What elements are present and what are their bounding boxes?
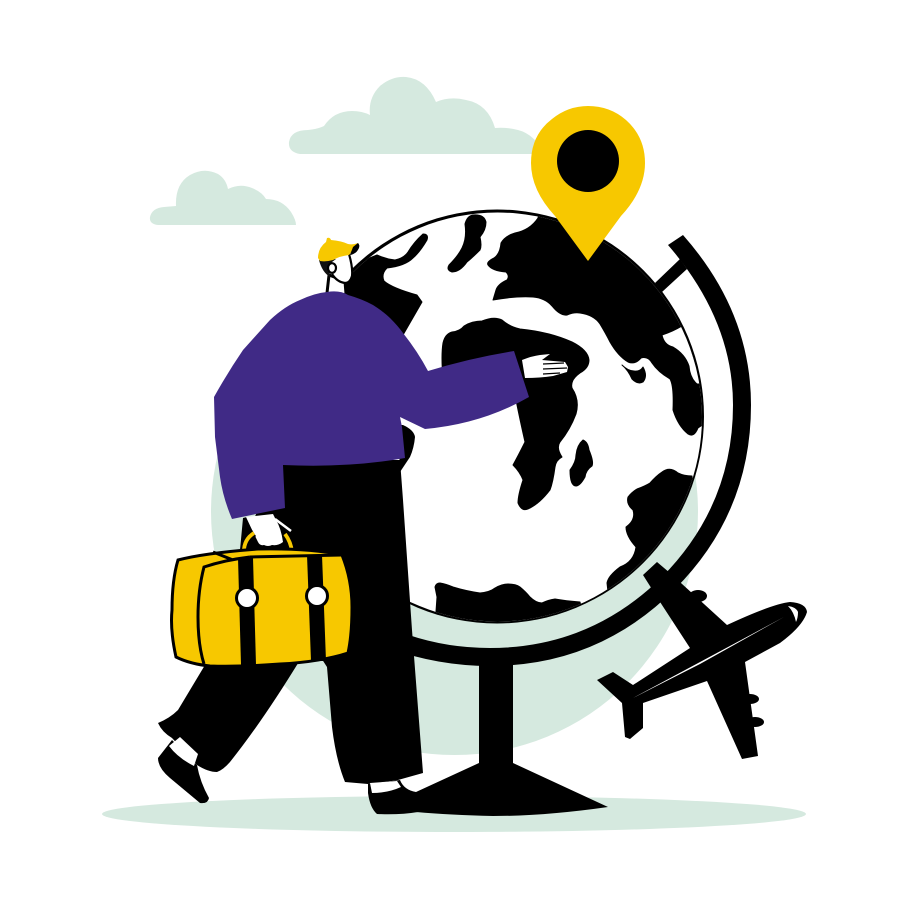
trousers standing leg and torso [245,460,423,784]
globe sphere [346,210,704,624]
engine [689,590,707,602]
land: crescent bay [622,365,646,383]
cap brim shadow [350,243,359,255]
ground shadow [102,796,806,832]
ring upper connector [655,259,687,292]
hair [319,259,336,277]
small cloud [150,171,296,225]
front shoe [368,780,418,814]
back shoe [158,737,209,803]
face outline [332,254,352,283]
front sock [370,781,401,793]
engine [746,717,764,727]
traveller [158,238,568,814]
globe stand [416,655,608,816]
land: central continent [442,318,589,510]
location pin [531,106,645,261]
hand on globe [522,354,568,378]
hand on suitcase handle [246,514,283,546]
land: south east [606,468,693,590]
sweater [214,291,529,519]
illustration: traveller at a globe [102,76,807,832]
suitcase front panel line [198,552,342,664]
large cloud [289,77,545,154]
neck [327,275,346,296]
strap behind hand [240,517,258,550]
engine [741,694,759,704]
suitcase strap left [238,558,256,665]
suitcase buckle right [306,586,328,606]
suitcase strap right [307,555,326,661]
trousers back leg [158,660,300,772]
land: island [570,440,593,486]
plane body and wings [597,562,807,759]
suitcase handle [244,533,292,554]
back sock [169,737,198,766]
background circle [211,456,698,755]
suitcase [172,533,352,666]
suitcase handle inner [244,533,292,554]
cap [318,238,358,261]
land: north east continent [488,200,710,435]
fuselage highlight [633,617,784,698]
thumb line [275,519,291,531]
face [332,254,352,283]
cockpit window [788,606,798,622]
land peeking between arm and torso [398,425,415,472]
ear [328,263,336,273]
land masses [346,214,702,622]
suitcase body [172,549,352,666]
suitcase buckle left [236,588,258,608]
pin centre [557,130,619,192]
land: southern coast [434,582,581,622]
land: north west [340,234,428,335]
finger lines [543,363,567,374]
globe meridian ring [388,235,751,666]
airplane [597,562,807,759]
land: northern island [448,215,486,272]
